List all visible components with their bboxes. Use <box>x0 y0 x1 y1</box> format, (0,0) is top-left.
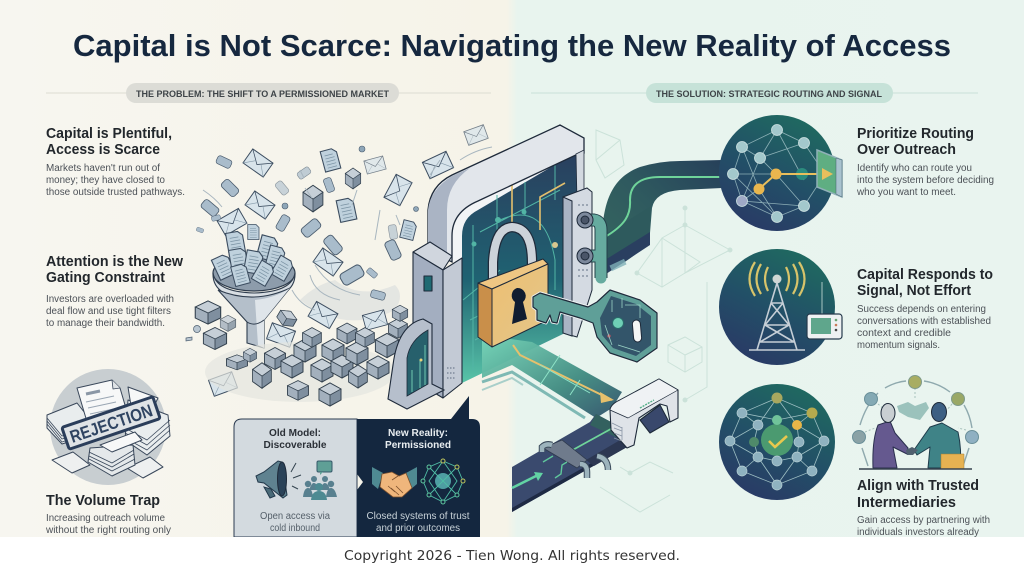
section header: the solution <box>531 83 978 103</box>
panel side: old model <box>234 419 357 537</box>
panel: old model vs new reality <box>234 396 480 537</box>
text block: attention: deal flow and use tight filters <box>46 306 171 317</box>
panel side: old model: Old Model: <box>269 428 321 439</box>
text block: capital is plentiful: Markets haven't run out of <box>46 163 160 174</box>
illustration: flying envelopes and documents <box>196 125 492 396</box>
icon: handshake <box>372 467 417 497</box>
panel side: new reality: New Reality: <box>388 428 448 439</box>
text block: capital is plentiful: money; they have closed to <box>46 175 165 186</box>
illustration: gate frame and circuit screen <box>428 125 584 383</box>
illustration: upper teal pipeline <box>602 160 722 274</box>
illustration: padlock <box>478 227 548 347</box>
text block: attention: Attention is the New <box>46 254 184 270</box>
icon: megaphone <box>256 461 301 498</box>
section header: the solution: THE SOLUTION: STRATEGIC ROUTING AND SIGNAL <box>656 89 882 100</box>
text block: align with trusted intermediaries <box>857 478 990 538</box>
text block: prioritize routing: Over Outreach <box>857 142 956 158</box>
text block: volume trap: The Volume Trap <box>46 493 160 509</box>
illustration: teal glass ramp <box>482 335 622 418</box>
illustration: lower arch gate <box>610 379 678 448</box>
text block: capital responds to signal: Success depends on entering <box>857 304 986 315</box>
panel side: old model: cold inbound <box>270 523 320 534</box>
text block: capital is plentiful: Access is Scarce <box>46 142 160 158</box>
panel side: new reality: Closed systems of trust <box>366 511 470 522</box>
text block: capital is plentiful: those outside trusted pathways. <box>46 187 185 198</box>
text block: volume trap: Increasing outreach volume <box>46 513 165 524</box>
background wireframe shapes <box>596 130 732 512</box>
text block: attention: Gating Constraint <box>46 270 165 286</box>
text block: attention: to manage their bandwidth. <box>46 318 165 329</box>
icon: handshake with intermediaries <box>852 376 978 469</box>
text block: capital responds to signal: momentum signals. <box>857 340 940 351</box>
text block: capital is plentiful: Capital is Plentiful, <box>46 126 172 142</box>
icon: audience with speech bubble <box>303 461 337 500</box>
text block: capital responds to signal: conversations with established <box>857 316 991 327</box>
text block: attention <box>46 254 184 329</box>
text block: capital is plentiful <box>46 126 185 198</box>
icon: glowing network <box>421 459 465 504</box>
panel side: old model: Discoverable <box>264 440 327 451</box>
title: Capital is Not Scarce: Navigating the New Reality of Access <box>73 28 951 63</box>
icon: signal tower <box>719 249 842 365</box>
panel side: new reality <box>357 396 480 537</box>
footer copyright: Copyright 2026 - Tien Wong. All rights reserved. <box>344 548 680 564</box>
text block: align with trusted intermediaries: Gain access by partnering with <box>857 515 990 526</box>
icon: routing network <box>719 115 842 231</box>
panel side: old model: Open access via <box>260 511 330 522</box>
icon: rejection pile: REJECTION <box>67 400 155 447</box>
icon: trusted network check <box>719 384 835 500</box>
panel side: new reality: and prior outcomes <box>376 523 460 534</box>
text block: prioritize routing: into the system before deciding <box>857 175 994 186</box>
text block: capital responds to signal: Capital Responds to <box>857 267 993 283</box>
illustration: pile of cubes <box>186 301 408 406</box>
illustration: left gate pillar <box>413 242 462 398</box>
text block: attention: Investors are overloaded with <box>46 294 174 305</box>
text block: capital responds to signal: Signal, Not Effort <box>857 283 971 299</box>
panel side: new reality: Permissioned <box>385 440 451 451</box>
illustration: funnel <box>211 231 295 348</box>
illustration: right gate pillar and pipes <box>563 188 601 337</box>
illustration: small arch door <box>388 319 444 409</box>
illustration: lower conveyor track <box>512 414 627 512</box>
text block: align with trusted intermediaries: Align with Trusted <box>857 478 979 494</box>
text block: prioritize routing <box>856 126 994 198</box>
section header: the problem: THE PROBLEM: THE SHIFT TO A PERMISSIONED MARKET <box>136 89 389 100</box>
text block: volume trap: without the right routing only <box>45 525 171 536</box>
section header: the problem <box>46 83 491 103</box>
text block: prioritize routing: Identify who can route you <box>857 163 972 174</box>
text block: volume trap <box>45 493 171 536</box>
text block: capital responds to signal <box>857 267 993 351</box>
text block: align with trusted intermediaries: Intermediaries <box>857 495 956 511</box>
illustration: key <box>533 290 657 362</box>
text block: prioritize routing: who you want to meet. <box>856 187 956 198</box>
text block: capital responds to signal: context and credible <box>857 328 951 339</box>
text block: prioritize routing: Prioritize Routing <box>857 126 974 142</box>
text block: align with trusted intermediaries: individuals investors already <box>857 527 979 538</box>
icon: rejection pile <box>47 369 170 485</box>
